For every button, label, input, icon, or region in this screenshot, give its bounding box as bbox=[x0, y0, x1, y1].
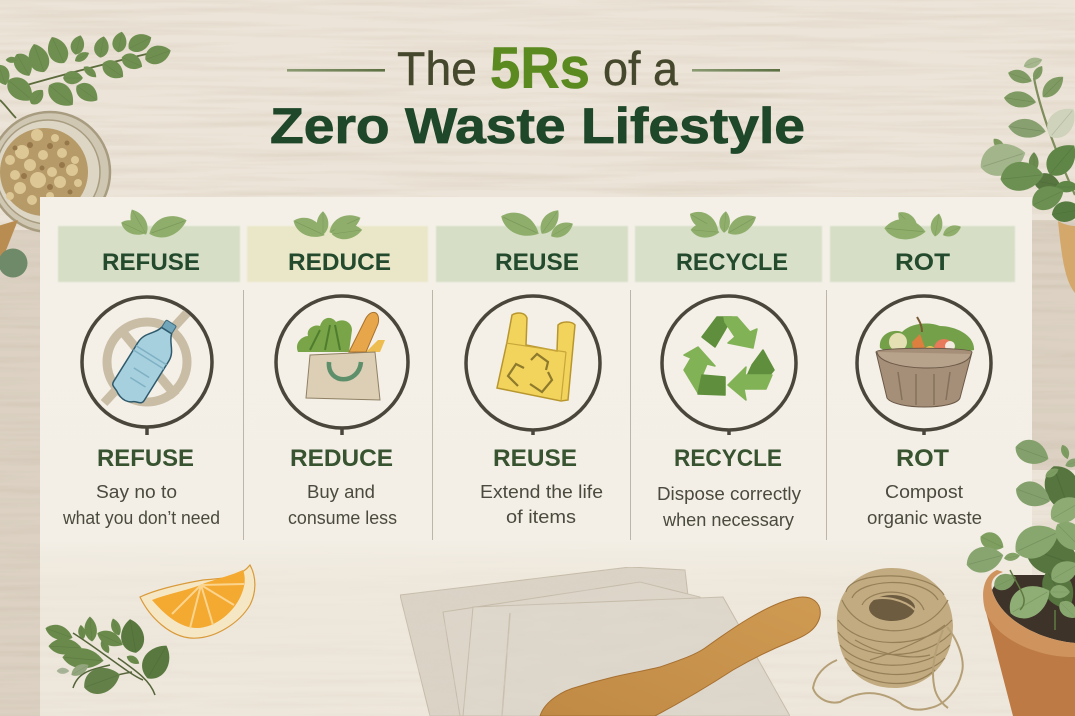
text: refuse description: what you don’t need bbox=[62, 508, 220, 528]
decoration: pot on right edge bbox=[1058, 221, 1075, 293]
icon: reuse heading leaves bbox=[497, 206, 576, 242]
decoration: bottom-left sprig bbox=[43, 616, 177, 699]
text: rot description: organic waste bbox=[867, 508, 982, 528]
subheading: rot: ROT bbox=[896, 445, 949, 472]
panel: main paper card bbox=[40, 197, 1032, 716]
column dividers bbox=[244, 290, 826, 540]
text: rot description: Compost bbox=[885, 482, 963, 502]
icon: compost bucket bbox=[857, 296, 991, 435]
text: rot description bbox=[867, 482, 982, 528]
title: of a bbox=[603, 42, 679, 95]
title bbox=[270, 36, 805, 154]
heading: refuse: REFUSE bbox=[102, 249, 200, 276]
heading: recycle: RECYCLE bbox=[676, 249, 788, 276]
text: refuse description bbox=[62, 482, 220, 528]
subheading: reuse: REUSE bbox=[493, 445, 577, 472]
heading: reuse: REUSE bbox=[495, 249, 579, 276]
subheading: recycle: RECYCLE bbox=[674, 445, 782, 472]
decoration: orange slice bbox=[140, 565, 255, 638]
text: recycle description: Dispose correctly bbox=[657, 484, 801, 504]
column: ROT bbox=[857, 207, 991, 528]
title: 5Rs bbox=[490, 36, 590, 101]
title: Zero Waste Lifestyle bbox=[270, 98, 805, 154]
panel: header bands bbox=[58, 226, 1015, 282]
column: RECYCLE bbox=[657, 207, 801, 530]
text: reduce description: consume less bbox=[288, 508, 397, 528]
title: The bbox=[397, 42, 477, 95]
decoration: wooden spoon bbox=[540, 597, 820, 716]
text: reuse description: of items bbox=[506, 507, 576, 527]
text: recycle description bbox=[657, 484, 801, 530]
column: REUSE bbox=[466, 206, 603, 527]
text: recycle description: when necessary bbox=[662, 510, 794, 530]
text: refuse description: Say no to bbox=[96, 482, 177, 502]
icon: reduce heading leaves bbox=[290, 210, 364, 242]
subheading: refuse: REFUSE bbox=[97, 445, 194, 472]
icon: recycle heading leaves bbox=[686, 207, 760, 240]
heading: reduce: REDUCE bbox=[288, 249, 391, 276]
icon: tote bag of groceries bbox=[276, 296, 408, 435]
text: reduce description bbox=[288, 482, 397, 528]
decoration: potted plant bbox=[963, 435, 1075, 716]
icon: refuse heading leaves bbox=[119, 206, 190, 242]
decoration: twine ball bbox=[813, 568, 963, 710]
column: REFUSE bbox=[62, 206, 220, 528]
icon: rot heading leaves bbox=[884, 207, 963, 241]
column: REDUCE bbox=[276, 210, 408, 528]
text: reuse description bbox=[480, 482, 603, 527]
heading: rot: ROT bbox=[895, 249, 950, 276]
icon: recycling arrows bbox=[662, 296, 796, 435]
decoration: top-right leafy sprig bbox=[976, 55, 1075, 224]
icon: no plastic bottle bbox=[82, 297, 212, 435]
icon: yellow reusable bag bbox=[466, 296, 600, 435]
decoration: glass jar of grains bbox=[0, 112, 110, 278]
subheading: reduce: REDUCE bbox=[290, 445, 393, 472]
text: reuse description: Extend the life bbox=[480, 482, 603, 502]
text: reduce description: Buy and bbox=[307, 482, 375, 502]
decoration: folded linen cloth bbox=[400, 567, 790, 716]
decoration: top-left leafy branch bbox=[0, 29, 174, 118]
